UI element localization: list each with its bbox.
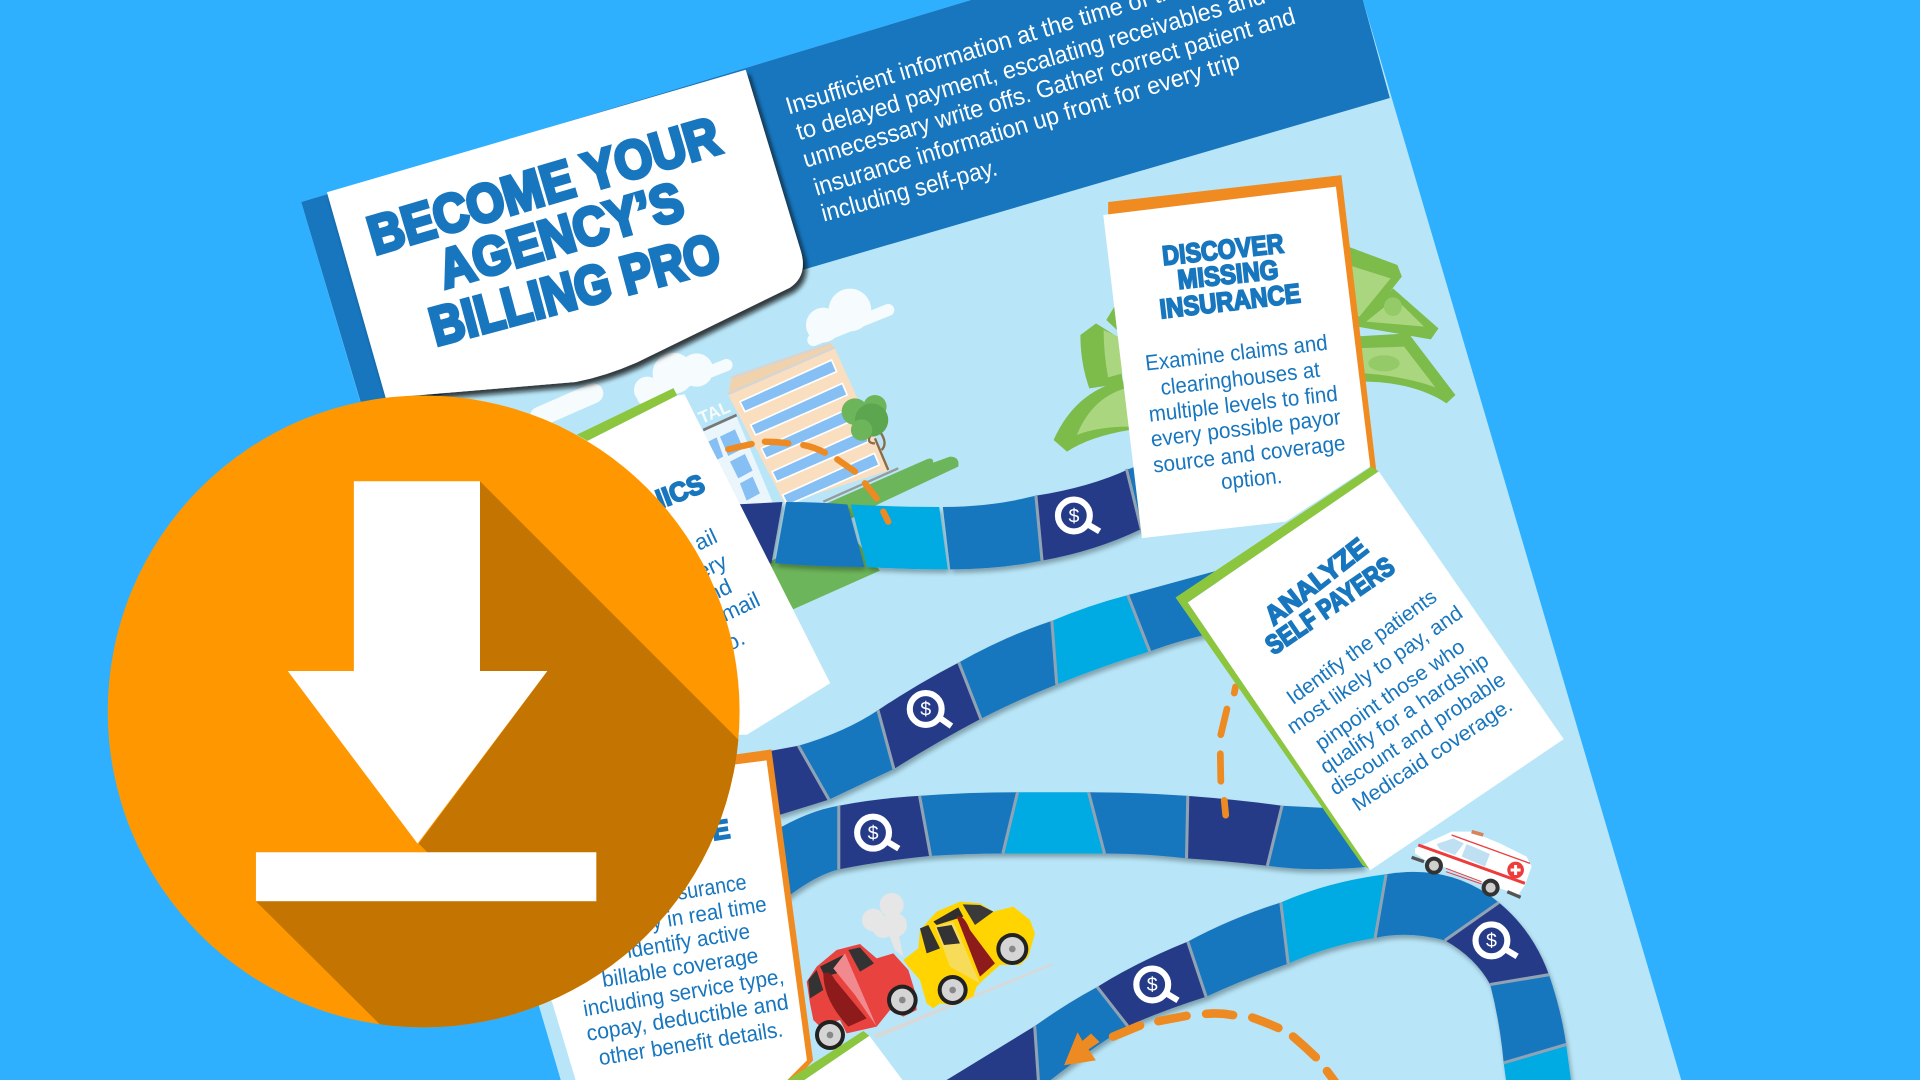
game road row 2: [765, 571, 1224, 816]
title: BECOME YOUR: [361, 106, 727, 266]
dashed route: hospital: [728, 442, 888, 522]
card text: including service type,: [581, 963, 786, 1021]
game road row 1: [735, 451, 1194, 569]
card text: source and coverage: [1152, 430, 1347, 478]
card heading: INSURANCE: [1158, 278, 1302, 324]
icon: magnifier with dollar sign: $: [920, 699, 931, 721]
banner text: insurance information up front for every trip: [811, 48, 1243, 202]
card: lower left coverage: [539, 749, 813, 1080]
clouds: [540, 289, 888, 417]
icon: magnifier with dollar sign: $: [1147, 974, 1158, 996]
card text: o.: [721, 625, 749, 656]
banner text: including self-pay.: [818, 154, 1000, 227]
card: analyze self payers: [1176, 467, 1564, 870]
card text: ery: [692, 549, 731, 584]
download arrow: [288, 481, 547, 844]
card text: identify active: [625, 918, 752, 963]
card text: Identify the patients: [1282, 585, 1441, 709]
card text: qualify for a hardship: [1316, 649, 1493, 779]
card heading: [1158, 228, 1302, 324]
card text: billable coverage: [600, 943, 760, 992]
long shadow: [256, 482, 738, 1028]
tree: [842, 395, 888, 470]
card: upper left: [490, 388, 830, 735]
poster edge sliver: [542, 1003, 576, 1080]
smoke: [862, 893, 907, 957]
card text: most likely to pay, and: [1283, 601, 1467, 739]
icon: magnifier with dollar sign: $: [868, 822, 879, 844]
icon: money pile: [1054, 245, 1455, 452]
card text: [1282, 585, 1517, 816]
banner text: unnecessary write offs. Gather correct patient and: [800, 3, 1298, 174]
title: BILLING PRO: [423, 223, 726, 358]
header banner: [301, 0, 1390, 416]
card heading: NCE: [671, 814, 732, 852]
card text: mail: [717, 587, 764, 627]
card text: [690, 523, 764, 656]
card text: clearinghouses at: [1159, 357, 1321, 400]
card heading: NICS: [641, 469, 709, 519]
dashed arrow: bottom: [1064, 1013, 1335, 1080]
car crash illustration: [807, 893, 1053, 1050]
card text: other benefit details.: [597, 1016, 785, 1070]
icon: magnifier with dollar sign: [1136, 969, 1178, 1000]
game road row 4: [931, 872, 1572, 1080]
icon: magnifier with dollar sign: [857, 817, 899, 849]
card heading: MISSING: [1176, 255, 1280, 295]
card text: y in real time: [649, 891, 768, 934]
card text: [581, 869, 790, 1070]
ground hill: [767, 457, 958, 609]
icon: magnifier with dollar sign: [1476, 924, 1517, 956]
yellow car: [903, 902, 1035, 1008]
hospital illustration: [695, 343, 958, 609]
title: [361, 106, 727, 358]
card text: option.: [1220, 463, 1283, 494]
icon: download badge: [108, 396, 740, 1028]
hospital wing: TAL: [695, 396, 733, 428]
download tray: [256, 852, 596, 901]
crash road line: [873, 963, 1053, 1038]
card: bottom edge: [787, 1031, 902, 1080]
card heading: DISCOVER: [1161, 228, 1285, 271]
game road row 3: [771, 792, 1365, 900]
card text: every possible payor: [1149, 404, 1342, 452]
card text: copay, deductible and: [585, 989, 790, 1046]
card text: ail: [690, 523, 721, 555]
icon: magnifier with dollar sign: [910, 693, 951, 726]
card text: Medicaid coverage.: [1348, 694, 1517, 816]
dashed route: middle: [1220, 687, 1236, 815]
card text: multiple levels to find: [1147, 381, 1339, 427]
card text: nd: [703, 574, 736, 607]
card text: Examine claims and: [1144, 330, 1329, 376]
title: AGENCY’S: [431, 171, 690, 300]
card: discover missing insurance: [1103, 175, 1376, 538]
icon: magnifier with dollar sign: $: [1068, 505, 1079, 527]
card heading: SELF PAYERS: [1260, 551, 1400, 660]
ambulance: [1412, 832, 1532, 897]
red car: [807, 944, 918, 1050]
hospital wing: [695, 396, 773, 504]
card text: pinpoint those who: [1311, 635, 1469, 755]
poster sheet: [301, 0, 1681, 1080]
icon: magnifier with dollar sign: $: [1486, 930, 1497, 952]
card text: discount and probable: [1326, 668, 1510, 800]
card text: surance: [675, 869, 748, 905]
card text: [1144, 330, 1347, 494]
hospital tower: [728, 343, 890, 505]
title card: [327, 70, 803, 398]
card heading: ANALYZE: [1259, 532, 1373, 631]
base line: [823, 468, 898, 502]
icon: magnifier with dollar sign: [1058, 500, 1100, 531]
